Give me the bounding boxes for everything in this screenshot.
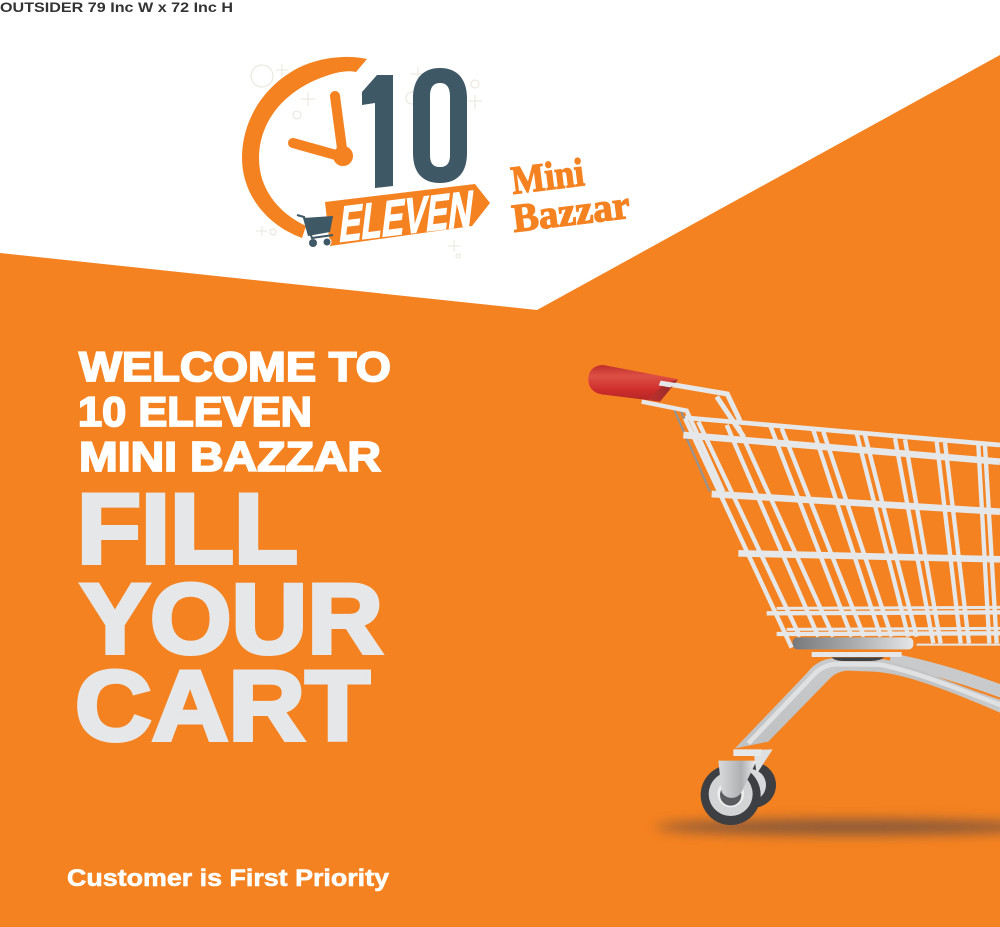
- headline: fill your cart: [75, 473, 383, 761]
- tagline: Mini Bazzar: Bazzar: [510, 182, 632, 241]
- slogan: Customer is First Priority: [67, 865, 390, 892]
- tagline: Mini Bazzar: Mini: [509, 149, 587, 203]
- number 10: [362, 68, 467, 188]
- tray: [793, 637, 913, 661]
- shopping cart illustration: [588, 365, 1000, 835]
- headline: fill your cart: YOUR: [80, 563, 383, 674]
- welcome heading: MINI BAZZAR: [79, 433, 381, 480]
- welcome heading: [78, 343, 391, 480]
- clock arc: [242, 57, 367, 238]
- tagline: Mini Bazzar: [509, 149, 632, 241]
- horizontal rails: [683, 418, 1000, 645]
- front tube: [735, 658, 1000, 748]
- headline: fill your cart: CART: [75, 650, 370, 761]
- grey side wire: [674, 409, 718, 492]
- red handle grip: [588, 365, 678, 402]
- handle bars: [661, 383, 744, 437]
- eleven wordmark: ELEVEN: [337, 179, 477, 253]
- clock hands: [293, 96, 348, 161]
- logo: [242, 57, 632, 258]
- eleven banner: [325, 184, 490, 246]
- vertical wires: [685, 418, 997, 648]
- front wheel: [701, 761, 761, 825]
- cart undercarriage: [701, 637, 1000, 825]
- welcome heading: 10 ELEVEN: [78, 388, 312, 435]
- logo cart icon: [297, 215, 333, 247]
- logo decorations: [251, 64, 482, 258]
- headline: fill your cart: FILL: [77, 473, 298, 584]
- rear wheel: [731, 749, 776, 808]
- floor shadow: [655, 819, 1000, 835]
- wire basket: [588, 365, 1000, 648]
- welcome heading: WELCOME TO: [79, 343, 391, 390]
- axle collar: [733, 749, 762, 756]
- rear tube: [890, 659, 1000, 692]
